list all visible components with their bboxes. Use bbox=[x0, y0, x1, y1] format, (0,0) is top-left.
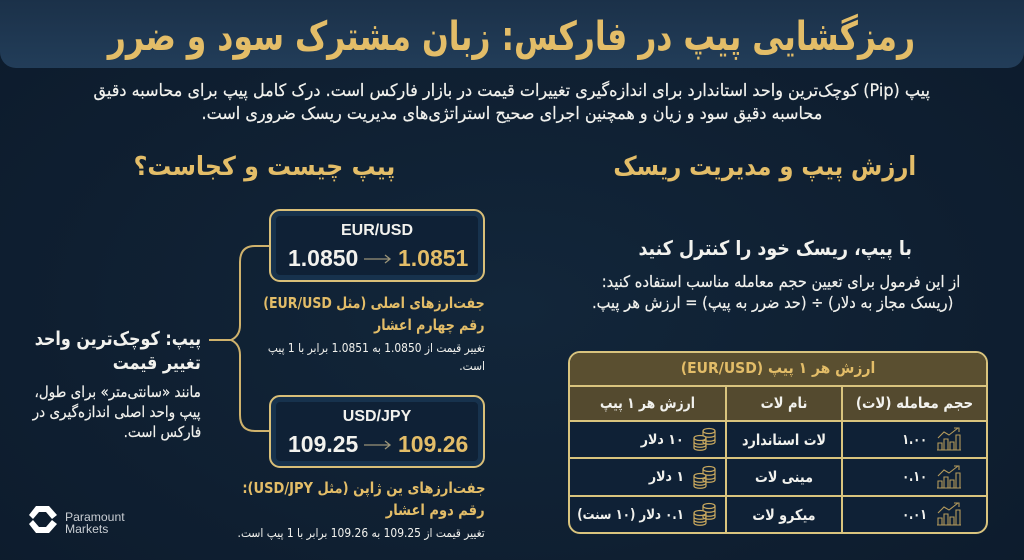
majors explanation: تغییر قیمت از 1.0850 به 1.0851 برابر با 1 پیپ bbox=[268, 341, 485, 355]
pip definition text bbox=[32, 328, 201, 441]
pip definition text: پیپ: کوچک‌ترین واحد bbox=[35, 328, 201, 350]
row: micro lot: میکرو لات bbox=[752, 506, 816, 524]
table header row: حجم معامله (لات) bbox=[856, 394, 973, 412]
row: mini lot: ۰.۱۰ bbox=[902, 469, 927, 485]
price box: USD/JPY: 109.26 bbox=[398, 431, 468, 457]
heading: pip value and risk: ارزش پیپ و مدیریت ریسک bbox=[613, 152, 916, 182]
price box: EUR/USD: 1.0851 bbox=[398, 245, 468, 271]
row: standard lot bbox=[640, 428, 961, 451]
heading: what is a pip: پیپ چیست و کجاست؟ bbox=[133, 152, 395, 182]
yen pairs explanation: تغییر قیمت از 109.25 به 109.26 برابر با 1 پیپ است. bbox=[238, 526, 485, 540]
yen pairs explanation bbox=[238, 479, 485, 540]
price box: USD/JPY bbox=[269, 395, 485, 468]
majors explanation: رقم چهارم اعشار bbox=[374, 316, 485, 334]
icon: coins bbox=[693, 428, 716, 451]
icon: chart bbox=[937, 502, 961, 526]
risk formula text bbox=[592, 272, 960, 312]
title: رمزگشایی پیپ در فارکس: زبان مشترک سود و ضرر bbox=[108, 14, 915, 60]
icon: coins bbox=[693, 466, 716, 489]
table header row: ارزش هر ۱ پیپ bbox=[600, 394, 695, 412]
pip definition text: مانند «سانتی‌متر» برای طول، bbox=[35, 383, 201, 401]
row: micro lot: ۰.۱ دلار (۱۰ سنت) bbox=[577, 507, 684, 523]
price box: USD/JPY: USD/JPY bbox=[343, 408, 411, 425]
row: standard lot: ۱۰ دلار bbox=[641, 432, 684, 448]
pip definition text: تغییر قیمت bbox=[113, 352, 201, 374]
risk control heading: با پیپ، ریسک خود را کنترل کنید bbox=[639, 236, 912, 260]
icon: coins bbox=[693, 502, 716, 526]
row: mini lot: ۱ دلار bbox=[649, 469, 684, 485]
icon: chart bbox=[937, 466, 961, 488]
icon: logo mark bbox=[29, 506, 57, 533]
table: pip value bbox=[568, 351, 988, 534]
pip definition text: پیپ واحد اصلی اندازه‌گیری در bbox=[33, 403, 201, 421]
table grid lines bbox=[570, 387, 986, 532]
intro text: محاسبه دقیق سود و زیان و همچنین اجرای صحیح استراتژی‌های مدیریت ریسک ضروری است. bbox=[201, 104, 822, 124]
table header row: نام لات bbox=[761, 394, 807, 412]
price box: USD/JPY: 109.25 bbox=[288, 431, 358, 457]
price box: EUR/USD: 1.0850 bbox=[288, 245, 358, 271]
row: micro lot bbox=[577, 502, 961, 526]
intro text bbox=[94, 80, 930, 124]
yen pairs explanation: جفت‌ارزهای ین ژاپن (مثل USD/JPY): bbox=[242, 479, 485, 497]
row: standard lot: لات استاندارد bbox=[742, 431, 826, 449]
icon: chart bbox=[937, 428, 961, 450]
table header row bbox=[570, 387, 986, 421]
intro text: پیپ (Pip) کوچک‌ترین واحد استاندارد برای اندازه‌گیری تغییرات قیمت در بازار فارکس است. درک کامل پیپ برای محاسبه دقیق bbox=[94, 81, 930, 101]
price box: EUR/USD: EUR/USD bbox=[341, 222, 413, 239]
price box: EUR/USD bbox=[269, 209, 485, 282]
yen pairs explanation: رقم دوم اعشار bbox=[386, 501, 485, 519]
table title row: ارزش هر ۱ پیپ (EUR/USD) bbox=[681, 359, 875, 377]
row: mini lot bbox=[648, 466, 961, 489]
table title row bbox=[570, 353, 986, 387]
logo: Paramount Markets: Paramount bbox=[65, 510, 125, 524]
connector bracket bbox=[209, 245, 269, 432]
logo: Paramount Markets bbox=[29, 506, 125, 536]
risk formula text: از این فرمول برای تعیین حجم معامله مناسب استفاده کنید: bbox=[601, 272, 960, 291]
majors explanation: جفت‌ارزهای اصلی (مثل EUR/USD) bbox=[264, 294, 485, 312]
row: mini lot: مینی لات bbox=[755, 468, 813, 486]
row: micro lot: ۰.۰۱ bbox=[902, 507, 927, 523]
logo: Paramount Markets: Markets bbox=[65, 522, 108, 536]
majors explanation: است. bbox=[459, 359, 485, 373]
row: standard lot: ۱.۰۰ bbox=[902, 432, 927, 448]
header band bbox=[0, 0, 1024, 68]
pip definition text: فارکس است. bbox=[123, 423, 201, 441]
risk formula text: (ریسک مجاز به دلار) ÷ (حد ضرر به پیپ) = ارزش هر پیپ. bbox=[592, 293, 953, 312]
majors explanation bbox=[264, 294, 485, 373]
